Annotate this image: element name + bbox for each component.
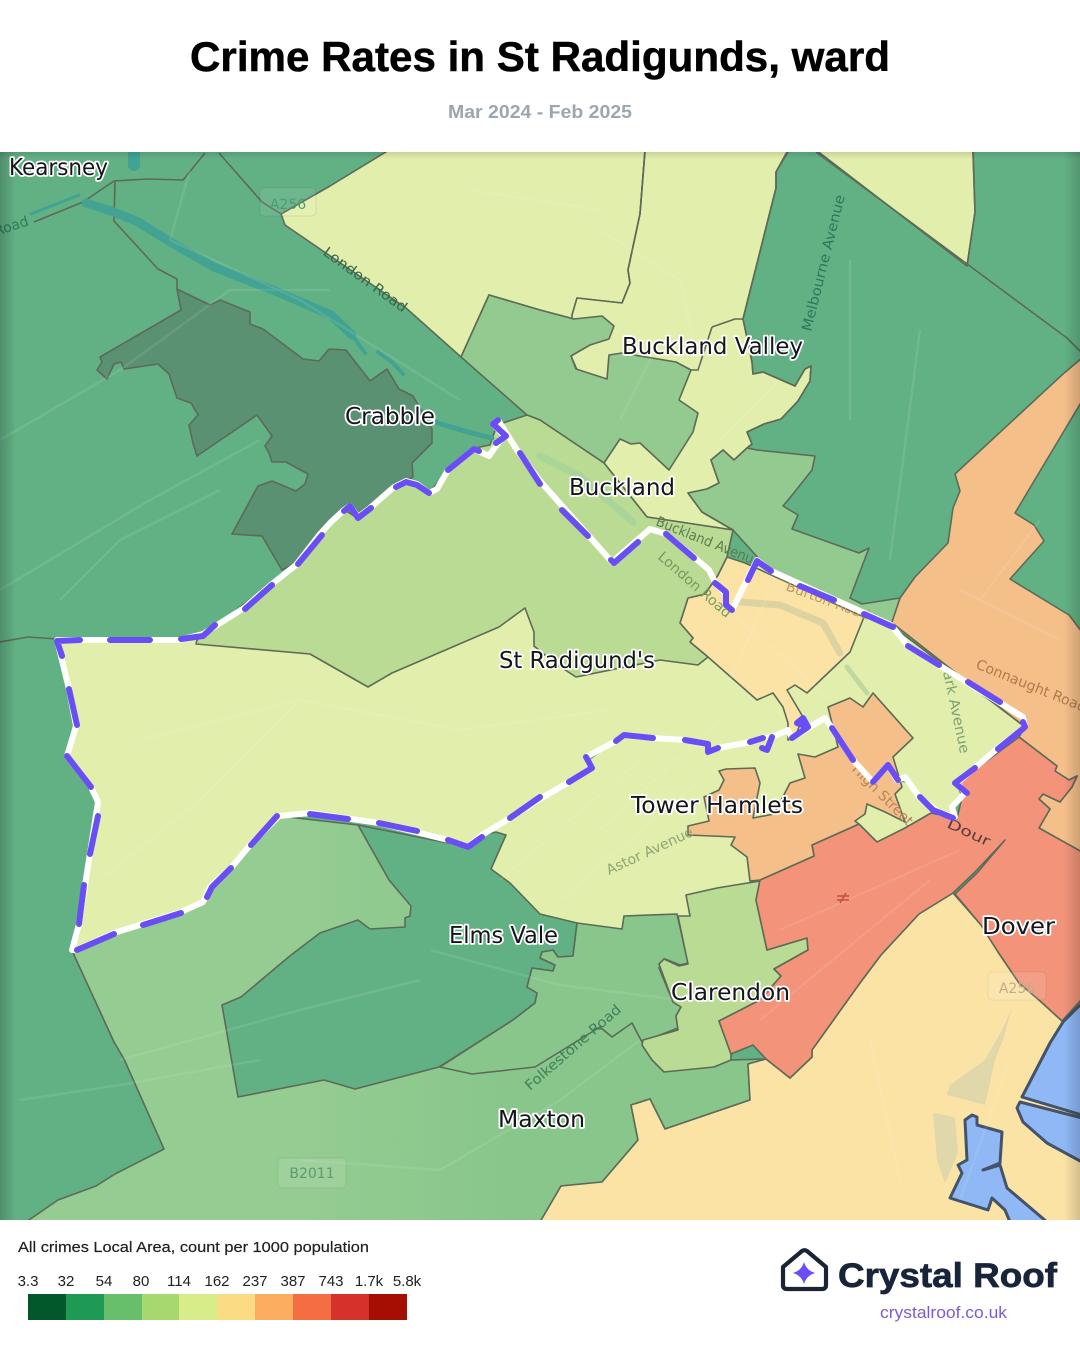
choropleth map panel bbox=[0, 150, 1080, 1222]
road label: Melbourne Avenue: Melbourne Avenue bbox=[799, 193, 849, 333]
car parks and terrain tint bbox=[933, 1008, 1012, 1183]
legend scale values: 80 bbox=[133, 1273, 149, 1290]
road label: Park Avenue: ark Avenue bbox=[939, 670, 972, 755]
area: Dover red bbox=[719, 737, 1080, 1078]
place label: Elms Vale: Elms Vale bbox=[449, 923, 558, 949]
water: outer harbour bbox=[1022, 1003, 1080, 1115]
legend scale values: 54 bbox=[96, 1273, 112, 1290]
legend scale values: 387 bbox=[280, 1273, 306, 1290]
road badge: B2011 bbox=[278, 1158, 346, 1188]
road badge: A256 north: A256 bbox=[270, 197, 306, 213]
marina and harbour water bbox=[950, 1003, 1080, 1222]
road label: Folkestone Road: Folkestone Road bbox=[522, 1002, 625, 1094]
area: north pale west bbox=[281, 150, 645, 357]
legend scale values: 3.3 bbox=[18, 1273, 38, 1290]
place label: Clarendon: Clarendon bbox=[671, 980, 790, 1006]
legend scale values: 1.7k bbox=[355, 1273, 384, 1290]
area: Clarendon bbox=[642, 881, 808, 1072]
road label: Dour: Dour bbox=[944, 816, 993, 850]
subtitle: date range: Mar 2024 - Feb 2025 bbox=[448, 102, 632, 122]
logo wordmark: Crystal Roof bbox=[838, 1257, 1058, 1295]
road network bbox=[0, 170, 1060, 1200]
place label: Tower Hamlets: Tower Hamlets bbox=[630, 793, 803, 819]
road badge: A256 south bbox=[988, 972, 1046, 1000]
legend scale values: 743 bbox=[318, 1273, 344, 1290]
area: ward west pale bbox=[61, 479, 1022, 947]
map area shapes bbox=[0, 150, 1080, 1222]
logo: Crystal Roof bbox=[783, 1250, 1058, 1322]
area: Crabble dark bbox=[97, 289, 432, 570]
icon: house with star bbox=[783, 1250, 826, 1289]
road label: Burton Road: Burton Road bbox=[784, 579, 872, 624]
place label: Buckland: Buckland bbox=[569, 475, 675, 501]
legend scale values: 237 bbox=[242, 1273, 268, 1290]
ward boundary: St Radigund's bbox=[57, 420, 1025, 950]
map edge vignette bbox=[0, 152, 1080, 1220]
road badge: B2011: B2011 bbox=[289, 1166, 335, 1182]
legend title: All crimes Local Area, count per 1000 population bbox=[18, 1239, 369, 1256]
area: Buckland mid green bbox=[461, 295, 698, 470]
ward dashes purple bbox=[57, 420, 1025, 950]
ward outline white bbox=[57, 420, 1025, 950]
legend bbox=[18, 1239, 422, 1320]
legend scale values bbox=[18, 1273, 422, 1290]
area: High Street orange bbox=[688, 693, 913, 881]
area: Maxton north bbox=[440, 914, 688, 1074]
icon: railway station bbox=[837, 893, 849, 903]
road label: Buckland Avenue: Buckland Avenue bbox=[654, 514, 763, 571]
road badge: A256 south: A256 bbox=[999, 981, 1035, 997]
place label: St Radigund's: St Radigund's bbox=[499, 648, 655, 674]
place label: Kearsney: Kearsney bbox=[9, 155, 108, 181]
area: Buckland east mid green bbox=[688, 448, 900, 625]
river Dour bbox=[31, 152, 867, 693]
water: harbour arm bbox=[1017, 1102, 1080, 1162]
area: inner boundary lines bbox=[0, 152, 1080, 642]
legend scale values: 162 bbox=[204, 1273, 230, 1290]
water: marina bbox=[950, 1115, 1047, 1222]
road label: London Road north: London Road bbox=[320, 244, 410, 316]
place label: Crabble: Crabble bbox=[345, 404, 435, 430]
area: north pale east bbox=[816, 150, 975, 266]
area: Buckland Valley pale bbox=[571, 150, 811, 530]
legend scale values: 32 bbox=[58, 1273, 74, 1290]
map base: mid green areas bbox=[0, 152, 1080, 1220]
road label: High Street: High Street bbox=[848, 762, 916, 830]
title: Crime Rates in St Radigunds, ward bbox=[190, 33, 890, 80]
road label: London Road south: London Road bbox=[654, 549, 734, 621]
road badge: A256 north bbox=[260, 188, 316, 216]
area: Tower Hamlets pale bbox=[468, 720, 931, 929]
place label: Buckland Valley: Buckland Valley bbox=[622, 334, 803, 360]
legend scale values: 114 bbox=[167, 1273, 191, 1290]
place label: Dover: Dover bbox=[982, 914, 1056, 940]
area: St Radigund's north light green bbox=[196, 415, 733, 687]
area: Connaught orange bbox=[891, 358, 1080, 852]
area: town centre pale yellow bbox=[680, 557, 864, 740]
legend colour bar bbox=[28, 1294, 407, 1320]
area: Dover south pale yellow bbox=[540, 893, 1080, 1222]
website link: crystalroof.co.uk bbox=[880, 1304, 1008, 1322]
legend scale values: 5.8k bbox=[393, 1273, 422, 1290]
road label: Astor Avenue: Astor Avenue bbox=[604, 824, 696, 879]
area: Elms Vale bbox=[222, 825, 577, 1097]
place label: Maxton: Maxton bbox=[498, 1107, 585, 1133]
area: south-west mid green bbox=[26, 816, 766, 1222]
